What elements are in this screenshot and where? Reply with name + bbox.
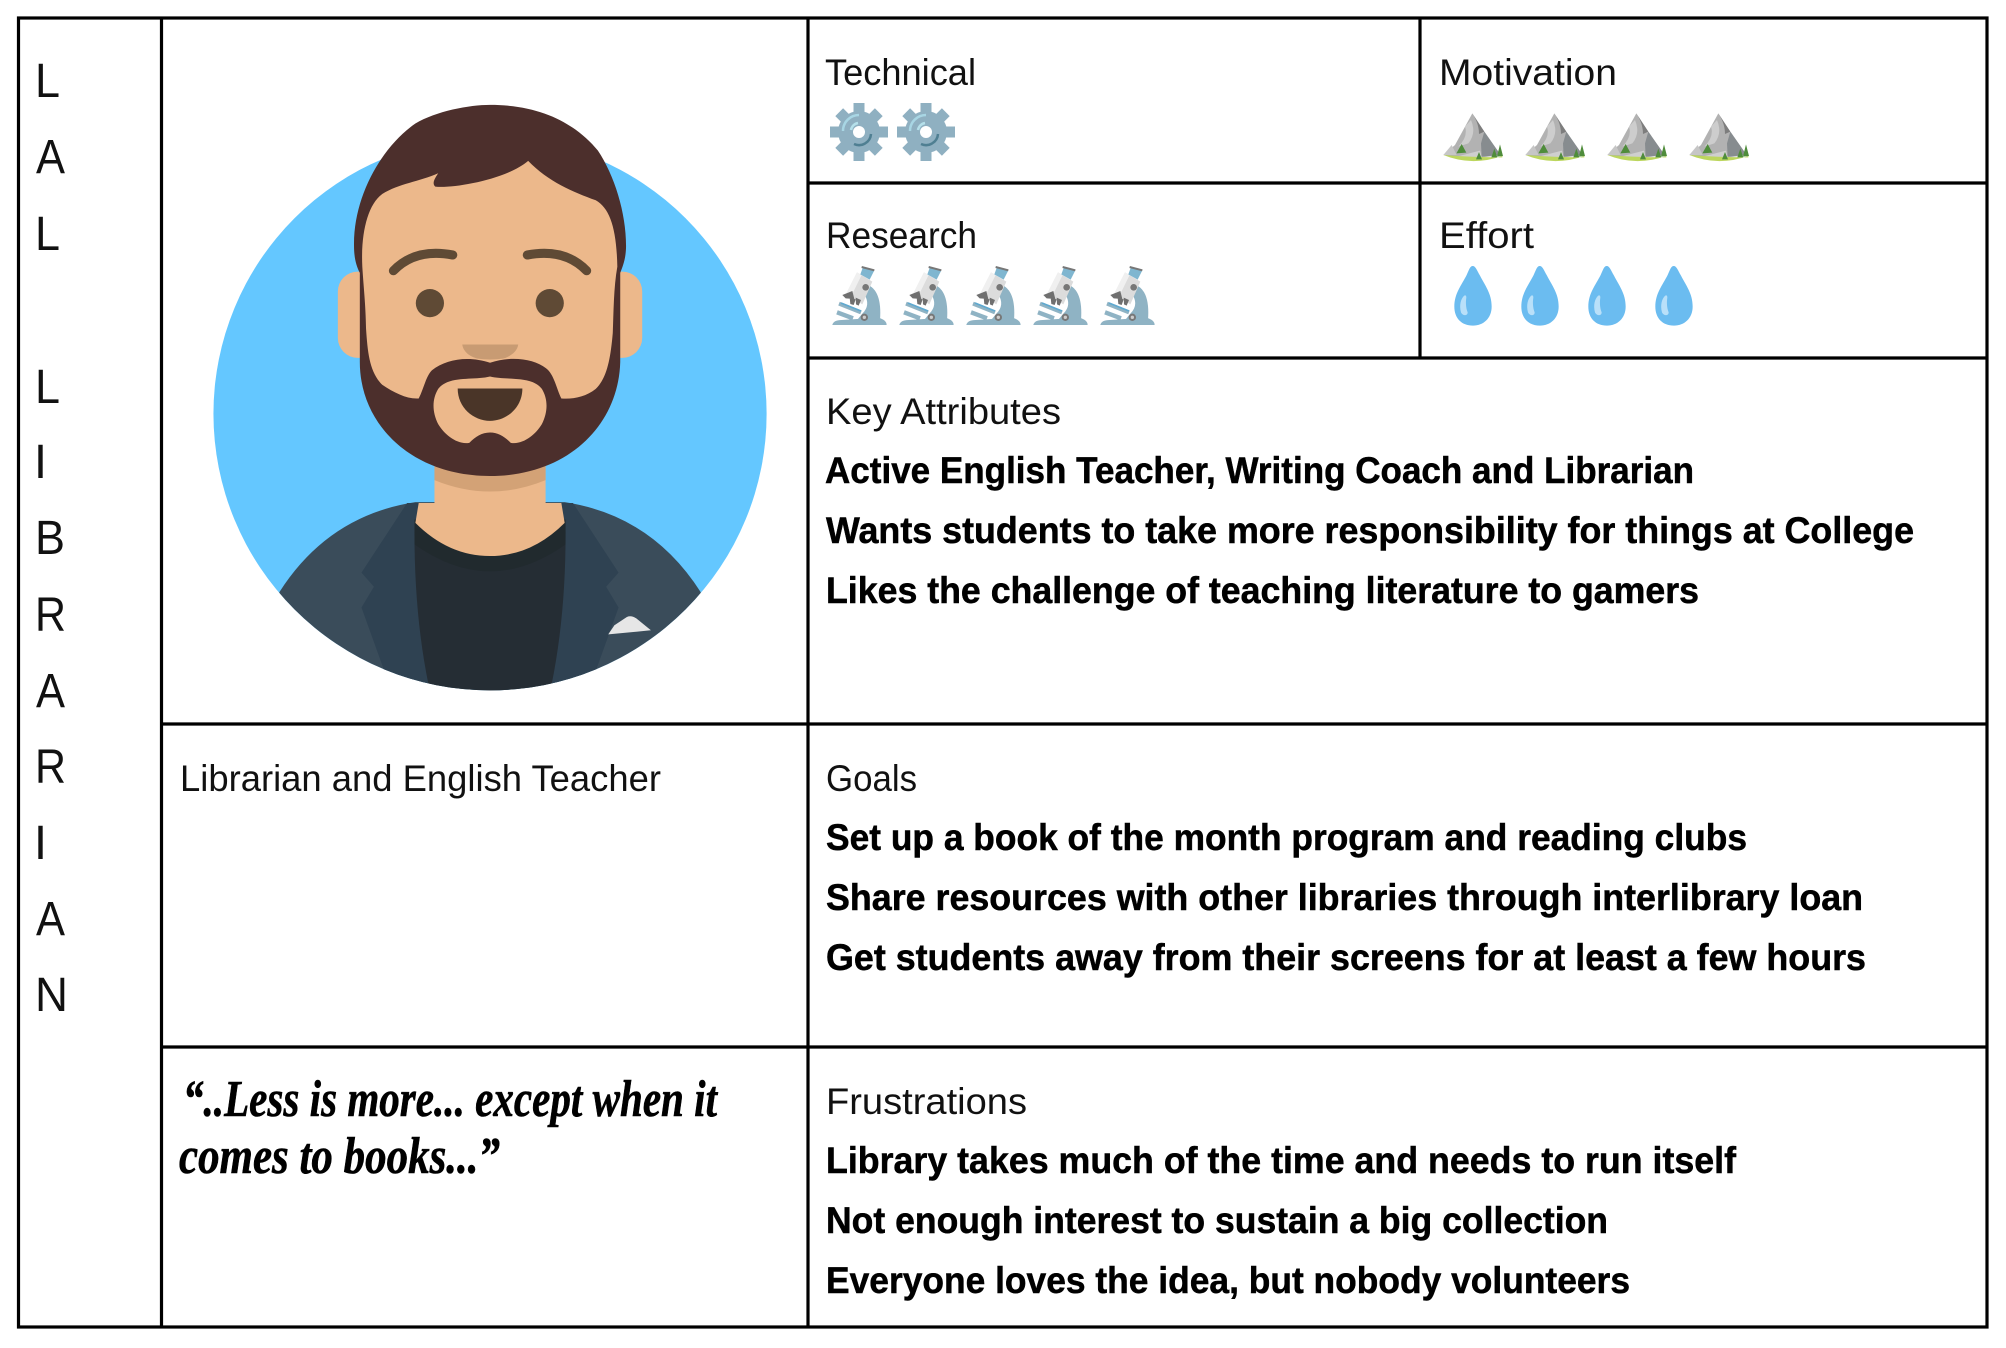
- key attributes list: Likes the challenge of teaching literature to gamers: [826, 570, 1699, 611]
- goals list: [826, 817, 1866, 978]
- panel: motivation: [1439, 52, 1749, 161]
- motivation heading: Motivation: [1439, 52, 1617, 93]
- icons: microscopes: [832, 267, 1155, 325]
- icons: gears: [830, 103, 955, 161]
- key attributes list: [825, 450, 1914, 611]
- frustrations list: [826, 1140, 1737, 1301]
- panel: key attributes: [825, 391, 1914, 611]
- goals list: Set up a book of the month program and reading clubs: [826, 817, 1747, 858]
- goals heading: Goals: [826, 758, 917, 799]
- persona name: vertical letters: I: [34, 817, 47, 870]
- persona name: vertical letters: N: [35, 969, 68, 1022]
- quote: “..Less is more... except when it: [183, 1071, 718, 1128]
- persona name: vertical letters: A: [36, 893, 65, 946]
- persona name: vertical letters: R: [35, 589, 66, 642]
- quote: [179, 1071, 718, 1185]
- frustrations list: Library takes much of the time and needs to run itself: [826, 1140, 1737, 1181]
- persona name: vertical letters: B: [35, 512, 65, 565]
- panel: goals: [826, 758, 1866, 978]
- icons: water drops: [1454, 266, 1693, 326]
- persona name: vertical letters: L: [35, 55, 60, 108]
- frustrations list: Everyone loves the idea, but nobody volunteers: [826, 1260, 1630, 1301]
- persona name: vertical letters: I: [34, 436, 47, 489]
- panel: effort: [1439, 215, 1693, 326]
- research heading: Research: [826, 215, 977, 256]
- persona name: vertical letters: L: [35, 361, 60, 414]
- panel: research: [826, 215, 1155, 325]
- key attributes list: Wants students to take more responsibility for things at College: [826, 510, 1914, 551]
- persona name: vertical letters: [34, 55, 68, 1022]
- goals list: Get students away from their screens for at least a few hours: [826, 937, 1866, 978]
- panel: frustrations: [826, 1081, 1737, 1301]
- technical heading: Technical: [825, 52, 976, 93]
- effort heading: Effort: [1439, 215, 1535, 256]
- avatar: bearded man in blue circle: [213, 105, 767, 702]
- role label: Librarian and English Teacher: [180, 758, 661, 799]
- icons: mountains: [1443, 113, 1749, 161]
- persona name: vertical letters: R: [35, 741, 66, 794]
- goals list: Share resources with other libraries through interlibrary loan: [826, 877, 1863, 918]
- persona name: vertical letters: L: [35, 208, 60, 261]
- key attributes list: Active English Teacher, Writing Coach and Librarian: [825, 450, 1694, 491]
- persona name: vertical letters: A: [36, 665, 65, 718]
- quote: comes to books...”: [179, 1128, 500, 1185]
- frustrations list: Not enough interest to sustain a big collection: [826, 1200, 1608, 1241]
- frustrations heading: Frustrations: [826, 1081, 1027, 1122]
- key attributes heading: Key Attributes: [826, 391, 1061, 432]
- persona name: vertical letters: A: [36, 131, 65, 184]
- panel: technical: [825, 52, 976, 161]
